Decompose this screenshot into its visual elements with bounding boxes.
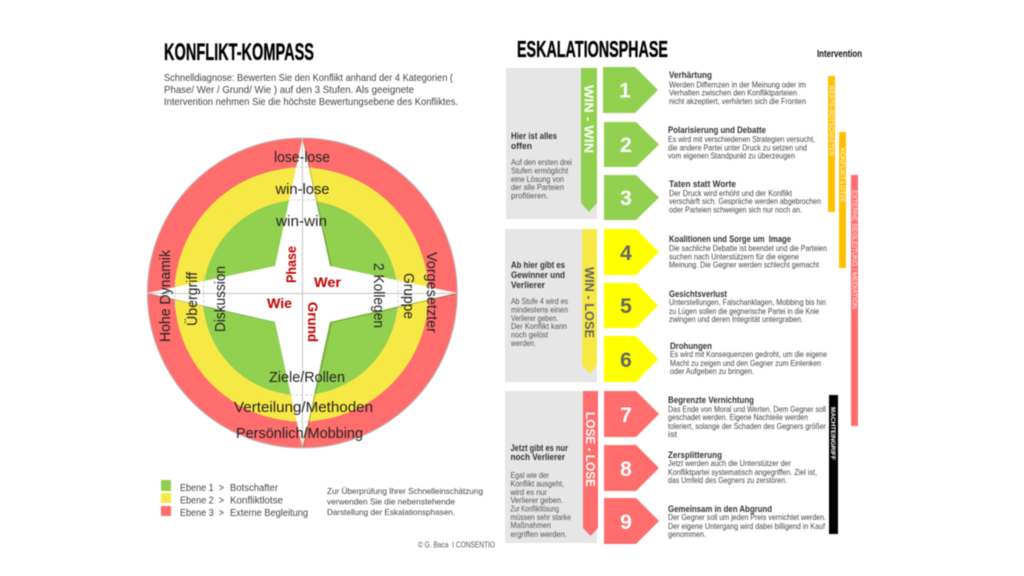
panel: win-win [506,68,597,219]
step 5: 5 [620,295,632,318]
phase labels [274,150,330,230]
panel text: Der Konflikt kann [511,321,567,331]
panel heading: Gewinner und [511,270,565,281]
legend: Ebene 3 > [180,508,224,519]
step 7 [604,391,826,439]
copyright: © G. Baca I CONSENTIO [418,540,495,550]
legend [161,480,308,519]
panel text: der alle Parteien [511,182,564,192]
category labels [267,246,342,342]
step 6: oder Aufgeben zu bringen. [670,366,754,376]
step 4 [604,229,827,275]
intervention bar: Werte-Botschafter: WERTE-BOTSCHAFTER [827,85,834,156]
step 1: nicht akzeptiert, verhärten sich die Fronten [669,96,806,106]
panel text: Maßnahmen [510,520,551,530]
panel heading [511,260,565,291]
note: verwenden Sie die nebenstehende [327,496,455,506]
step 2: Es wird mit verschiedenen Strategien versucht, [668,134,815,144]
intervention bar: Werte-Botschafter [827,76,835,212]
compass star shadow [148,139,458,449]
legend: Botschafter [230,483,279,494]
step 4: Meinung. Die Gegner werden schlecht gemacht [669,260,820,270]
ribbon label: WIN - LOSE [582,267,597,338]
step 2: vom eigenen Standpunkt zu überzeugen [668,150,795,160]
title: Konflikt-Kompass: KONFLIKT-KOMPASS [164,39,314,66]
step 9: genommen. [668,529,706,539]
heading: Intervention: Intervention [817,49,862,60]
panel text: mindestens einen [511,304,568,314]
step 5: zu Lügen sollen die gegnerische Partei in die Knie [669,306,819,316]
wer labels [370,252,439,333]
panel: win-lose [505,229,597,382]
panel text: Verlierer geben. [511,313,558,323]
wer labels: 2 Kollegen [370,263,386,328]
intervention bar: Externe Begleitung [850,175,858,426]
intro text [164,72,458,108]
intervention bar: Konflikt-Lotse: KONFLIKT-LOTSE [838,148,845,204]
step 6: Es wird mit Konsequenzen gedroht, um die eigene [670,349,827,359]
wie labels: Hohe Dynamik [158,249,174,342]
step 6: Drohungen [670,341,712,352]
panel text: Zur Konfliktlösung [510,504,559,514]
step 9: 9 [620,511,632,534]
step 8: das Umfeld des Gegners zu zerstören. [668,475,787,485]
legend: Konfliktlotse [230,496,283,506]
category labels: Wie [267,295,292,311]
panel text: profitieren. [511,190,548,200]
step 2: 2 [620,134,632,157]
phase labels: win-lose [274,182,330,198]
step 1: 1 [619,80,631,102]
outer ring: level 3 [147,138,457,448]
step 8: 8 [620,458,632,481]
compass star [147,138,457,448]
panel heading [510,443,568,463]
step 1: Werden Differnzen in der Meinung oder im [669,79,806,89]
title: Eskalationsphase: ESKALATIONSPHASE [517,36,668,62]
wer labels: Vorgesetzter [423,252,439,333]
step 7: ist [668,429,678,439]
panel heading: Hier ist alles [511,131,557,142]
step 3: Taten statt Worte [669,179,736,190]
category labels: Grund [305,302,321,342]
step 2: Polarisierung und Debatte [668,125,766,136]
ribbon: win-lose [582,229,597,374]
intro text: Schnelldiagnose: Bewerten Sie den Konflikt anhand der 4 Kategorien ( [164,72,453,84]
grund labels: Persönlich/Mobbing [236,426,363,442]
step 7: geschadet werden. Eigene Nachteile werden [668,412,808,422]
intro text: Phase/ Wer / Grund/ Wie ) auf den 3 Stufen. Als geeignete [164,84,414,96]
step 4: 4 [620,242,632,265]
step 5: Unterstellungen, Falschanklagen, Mobbing bis hin [669,297,826,307]
wie labels: Diskussion [213,266,229,332]
step 3 [604,175,821,220]
wie labels [158,249,229,342]
panel text: eine Lösung von [511,174,564,184]
panel text: ergriffen werden. [510,529,567,539]
middle ring: level 2 [174,168,428,422]
panel heading: Jetzt gibt es nur [510,443,568,454]
ribbon label: LOSE - LOSE [583,412,598,487]
note [327,486,483,517]
step 4: Die sachliche Debatte ist beendet und die Parteien [669,243,827,253]
step 3: 3 [620,187,632,210]
step 3: oder Parteien schweigen sich nur noch an. [669,204,802,214]
legend: Ebene 1 > [180,483,224,494]
intervention bar: Konflikt-Lotse [838,132,846,268]
panel heading: Ab hier gibt es [511,260,565,271]
chart: compass [147,138,458,449]
step 1: Verhalten zwischen den Konfliktparteien [669,88,797,98]
step 7: Begrenzte Vernichtung [668,395,754,406]
panel text: Verlierer geben. [510,495,563,505]
intervention bar: Externe Begleitung: EXTERNE BEGLEITUNG / MEDIATION [850,190,857,309]
phase labels: win-win [275,214,327,230]
step 5: zwingen und deren Integrität untergraben. [669,314,803,324]
category labels: Phase [283,246,299,283]
grund labels: Verteilung/Methoden [234,400,373,416]
step 5: Gesichtsverlust [669,289,728,300]
panel heading [511,131,557,152]
panel text [510,296,568,348]
step 7: 7 [620,404,632,427]
panel text: Egal wie der [510,470,549,480]
note: Darstellung der Eskalationsphasen. [327,507,455,517]
legend: Externe Begleitung [230,508,308,519]
panel text: wird es nur [510,487,547,497]
panel heading: Verlierer [511,280,545,291]
phase labels: lose-lose [274,150,330,166]
panel text: Konflikt ausgeht, [510,478,564,488]
panel text: werden. [510,338,536,348]
step 7: Das Ende von Moral und Werten. Dem Gegner soll [668,404,826,414]
step 3: verschärft sich. Gespräche werden abgebrochen [669,196,821,206]
step 1: Verhärtung [669,70,712,81]
step 9: Der Gegner soll um jeden Preis vernichtet werden. [668,512,826,522]
step 3: Der Druck wird erhöht und der Konflikt [669,188,793,198]
wer labels: Gruppe [400,273,416,319]
category labels: Wer [314,274,342,290]
step 7: toleriert, solange der Schaden des Gegners größer [668,421,826,431]
inner circle: level 1 [203,200,398,395]
guide lines [147,138,457,448]
step 9 [604,498,826,544]
panel: lose-lose [505,391,598,543]
panel text: Auf den ersten drei [511,157,572,167]
step 4: suchen nach Unterstützern für die eigene [669,252,799,262]
grund labels [234,370,373,442]
note: Zur Überprüfung Ihrer Schnelleinschätzung [327,486,483,496]
step 6: 6 [620,349,632,372]
step 8: Zersplitterung [668,450,722,461]
step 4: Koalitionen und Sorge um Image [669,234,791,245]
panel heading: noch Verlierer [510,452,565,463]
step 2 [604,122,815,167]
step 8: Konfliktpartei systematisch angegriffen. Ziel ist, [668,467,817,477]
ribbon: lose-lose [583,391,598,536]
panel text [510,470,571,539]
intervention bar: Machteingriff: MACHTEINGRIFF [829,407,836,460]
intro text: Intervention nehmen Sie die höchste Bewertungsebene des Konfliktes. [164,96,458,108]
panel text: noch gelöst [511,330,549,340]
step 1 [603,67,806,113]
step 9: Gemeinsam in den Abgrund [668,504,772,515]
panel heading: offen [511,141,532,152]
step 8 [604,445,817,491]
intervention bar: Machteingriff [829,395,838,534]
step 6 [604,336,827,382]
step 6: Macht zu zeigen und den Gegner zum Einlenken [670,358,821,368]
step 9: Der eigene Untergang wird dabei billigend in Kauf [668,521,826,531]
step 5 [604,283,826,328]
legend: Ebene 2 > [180,496,224,506]
panel text: Stufen ermöglicht [511,166,569,176]
panel text: Ab Stufe 4 wird es [511,296,568,306]
ribbon label: WIN - WIN [582,85,596,153]
panel text: müssen sehr starke [510,512,571,522]
panel text [511,157,572,200]
step 2: die andere Partei unter Druck zu setzen und [668,142,807,152]
wie labels: Übergriff [183,271,201,326]
step 8: Jetzt werden auch die Unterstützer der [668,458,791,468]
ribbon: win-win [581,68,597,212]
grund labels: Ziele/Rollen [269,370,345,386]
